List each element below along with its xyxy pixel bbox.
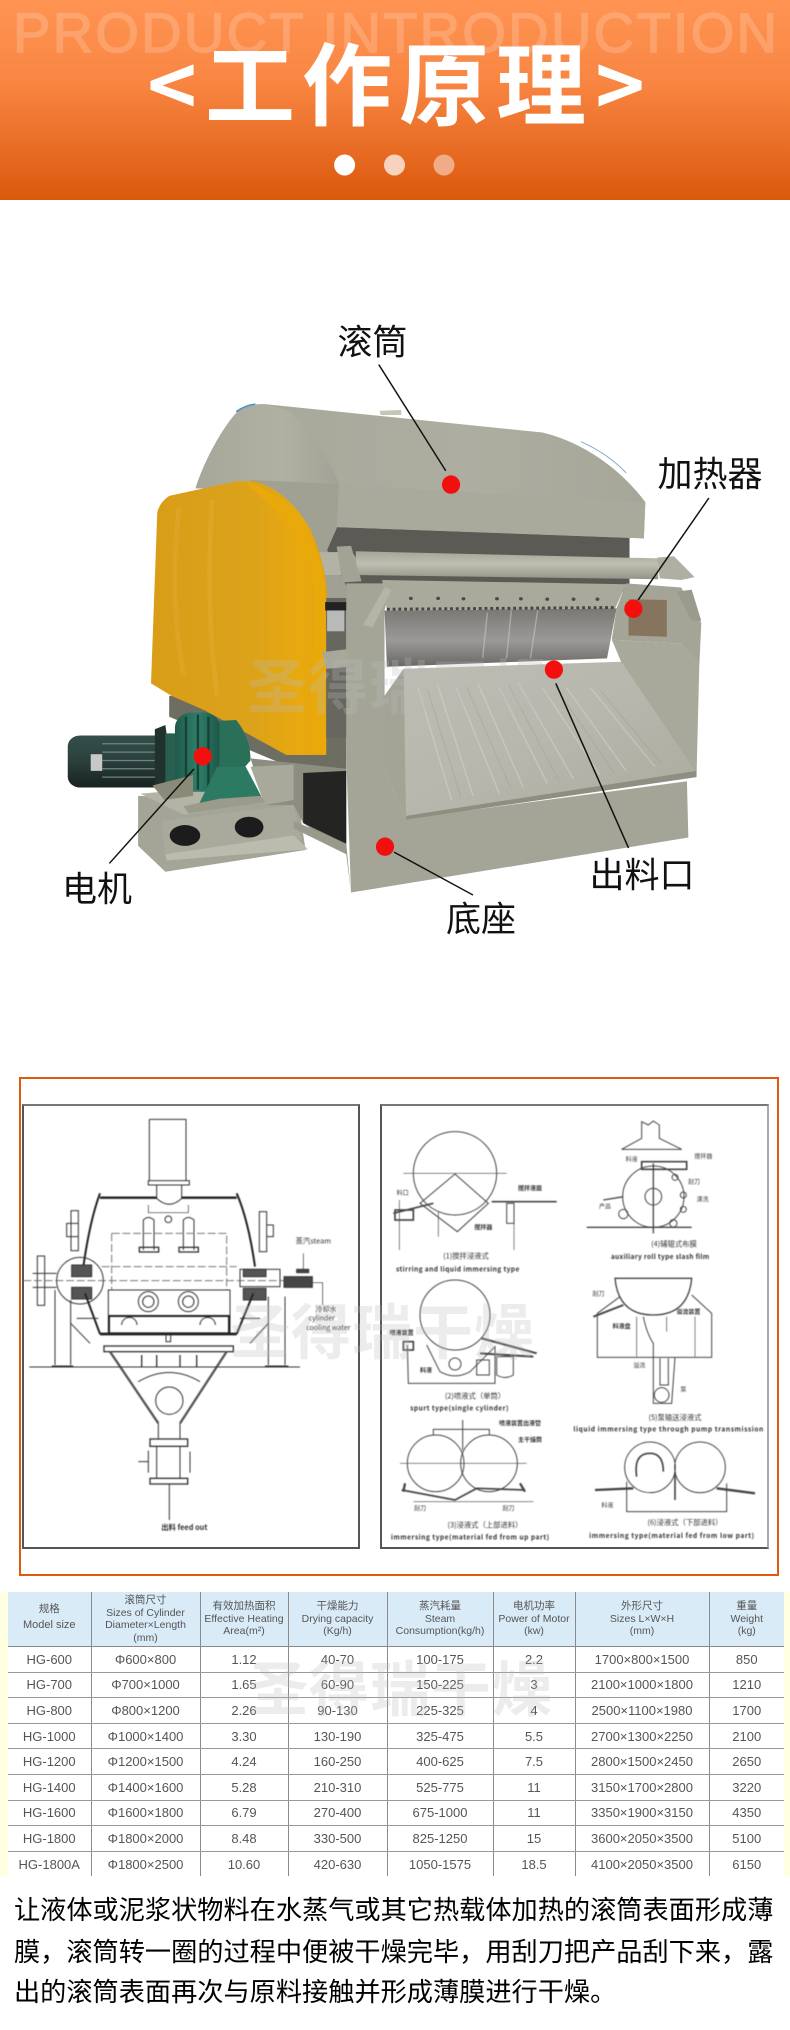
heading: working principle: < xyxy=(147,21,197,142)
specification table: 5.5 xyxy=(525,1729,543,1744)
specification table: 2700×1300×2250 xyxy=(591,1729,693,1744)
roller bar xyxy=(313,546,695,583)
label: feed out: 出料 feed out xyxy=(161,1522,207,1533)
specification table: 2.2 xyxy=(525,1652,543,1667)
discharge chute xyxy=(385,662,697,820)
type 1: stirring immersing: 料口 xyxy=(397,1188,409,1197)
specification table: 525-775 xyxy=(416,1780,464,1795)
type 1: stirring immersing: stirring and liquid immersing type xyxy=(396,1263,519,1273)
type 5: pump transmission: liquid immersing type through pump transmission xyxy=(573,1424,763,1434)
callout labels: 出料口 xyxy=(589,848,695,898)
specification table: 3350×1900×3150 xyxy=(591,1805,693,1820)
cover end panel behind guard xyxy=(251,480,347,606)
specification table: 210-310 xyxy=(314,1780,361,1795)
type 6: immersing lower feed xyxy=(589,1442,755,1540)
specification table xyxy=(8,1592,784,1876)
specification table: 160-250 xyxy=(314,1754,361,1769)
drawing: six film-forming types xyxy=(380,1104,769,1549)
specification table: HG-1000 xyxy=(23,1729,76,1744)
specification table: (Kg/h) xyxy=(323,1625,352,1637)
specification table: 130-190 xyxy=(314,1729,361,1744)
description paragraph: 膜，滚筒转一圈的过程中便被干燥完毕，用刮刀把产品刮下来，露 xyxy=(14,1931,773,1969)
heading: working principle: 工作原理 xyxy=(205,14,593,144)
type 1: stirring immersing: 搅拌器 xyxy=(474,1222,492,1231)
type 5: pump transmission: 溢流 xyxy=(633,1360,645,1369)
type 4: auxiliary roll: 产品 xyxy=(599,1201,611,1210)
specification table: Φ1800×2000 xyxy=(108,1831,183,1846)
callout labels: 电机 xyxy=(62,862,132,912)
rear fill behind roller xyxy=(322,517,630,604)
specification table: 40-70 xyxy=(321,1652,354,1667)
specification table: 325-475 xyxy=(416,1729,464,1744)
specification table: Steam xyxy=(425,1613,455,1625)
specification table: (mm) xyxy=(133,1632,158,1644)
specification table: 11 xyxy=(527,1780,541,1795)
type 6: immersing lower feed: 料液 xyxy=(601,1500,613,1509)
type 4: auxiliary roll: auxiliary roll type slash film xyxy=(611,1251,709,1261)
specification table: 330-500 xyxy=(314,1831,361,1846)
main frame xyxy=(346,583,688,893)
specification table: 滚筒尺寸 xyxy=(124,1594,166,1606)
drawing: section view of the dryer xyxy=(22,1104,360,1549)
label: cooling water xyxy=(306,1305,351,1333)
specification table: HG-1600 xyxy=(23,1805,76,1820)
specification table: 3600×2050×3500 xyxy=(591,1831,693,1846)
panel: orange framed technical drawings xyxy=(19,1077,779,1576)
specification table: 1700×800×1500 xyxy=(595,1652,689,1667)
type 5: pump transmission: 刮刀 xyxy=(592,1289,604,1298)
specification table: HG-1800 xyxy=(23,1831,76,1846)
type 1: stirring immersing: (1)搅拌浸液式 xyxy=(443,1250,489,1261)
header banner xyxy=(0,0,790,200)
specification table: 18.5 xyxy=(521,1857,547,1872)
specification table: 675-1000 xyxy=(413,1805,467,1820)
specification table: Effective Heating xyxy=(204,1613,284,1625)
specification table: HG-600 xyxy=(26,1652,72,1667)
specification table: 90-130 xyxy=(317,1703,358,1718)
specification table: 2100 xyxy=(732,1729,761,1744)
specification table: 6.79 xyxy=(231,1805,257,1820)
motor side base xyxy=(138,783,308,872)
type 2: spurt single cylinder: spurt type(single cylinder) xyxy=(410,1403,509,1413)
specification table: 15 xyxy=(527,1831,541,1846)
specification table: 400-625 xyxy=(416,1754,464,1769)
specification table: 2500×1100×1980 xyxy=(592,1703,692,1718)
drawing: feeding type diagrams xyxy=(389,1120,764,1542)
drum cover xyxy=(196,404,645,546)
description paragraph: 让液体或泥浆状物料在水蒸气或其它热载体加热的滚筒表面形成薄 xyxy=(14,1889,773,1927)
specification table: Φ1800×2500 xyxy=(108,1857,183,1872)
type 3: immersing upper feed: 主干燥筒 xyxy=(518,1435,542,1444)
specification table: 6150 xyxy=(732,1857,761,1872)
specification table: Drying capacity xyxy=(302,1613,373,1625)
specification table: 2.26 xyxy=(231,1703,257,1718)
specification table: 7.5 xyxy=(525,1754,543,1769)
specification table: HG-800 xyxy=(26,1703,72,1718)
specification table: 225-325 xyxy=(416,1703,464,1718)
type 6: immersing lower feed: (6)浸液式（下部进料） xyxy=(648,1517,722,1528)
yellow guard xyxy=(151,481,327,755)
specification table: 8.48 xyxy=(231,1831,257,1846)
specification table: 1210 xyxy=(732,1677,761,1692)
watermark: table: 圣得瑞干燥 xyxy=(248,1642,553,1729)
specification table: 3150×1700×2800 xyxy=(591,1780,693,1795)
right side housing xyxy=(612,583,701,777)
red marker dots xyxy=(194,475,642,856)
specification table: 4100×2050×3500 xyxy=(591,1857,693,1872)
specification table: HG-700 xyxy=(26,1677,72,1692)
specification table: HG-1200 xyxy=(23,1754,76,1769)
specification table: Φ1600×1800 xyxy=(108,1805,183,1820)
specification table: 850 xyxy=(736,1652,758,1667)
english background title: PRODUCT INTRODUCTION xyxy=(13,1,777,64)
cylinder and linkage xyxy=(322,598,351,738)
specification table: 150-225 xyxy=(416,1677,464,1692)
type 2: spurt single cylinder: (2)喷液式（单筒） xyxy=(445,1390,505,1401)
type 3: immersing upper feed: 刮刀 xyxy=(502,1504,514,1513)
specification table: 3.30 xyxy=(231,1729,257,1744)
specification table: Power of Motor xyxy=(498,1613,570,1625)
type 5: pump transmission xyxy=(573,1278,763,1434)
type 2: spurt single cylinder: 喷液装置 xyxy=(390,1328,414,1337)
specification table: 2650 xyxy=(732,1754,761,1769)
type 4: auxiliary roll: (4)辅辊式布膜 xyxy=(651,1239,697,1250)
specification table: 11 xyxy=(527,1805,541,1820)
callout labels: 加热器 xyxy=(657,446,763,498)
specification table: Φ800×1200 xyxy=(111,1703,180,1718)
specification table: (kg) xyxy=(738,1625,756,1637)
type 4: auxiliary roll: 清洗 xyxy=(697,1195,709,1204)
specification table: (mm) xyxy=(630,1625,654,1637)
specification table: 4 xyxy=(530,1703,538,1718)
specification table: HG-1800A xyxy=(19,1857,80,1872)
specification table: Model size xyxy=(23,1619,76,1631)
callout labels: 滚筒 xyxy=(337,314,408,366)
specification table: Φ1000×1400 xyxy=(108,1729,183,1744)
callout labels: 底座 xyxy=(446,892,516,942)
label: cooling water: cylinder xyxy=(308,1314,335,1324)
description paragraph xyxy=(14,1889,773,2009)
description paragraph: 出的滚筒表面再次与原料接触并形成薄膜进行干燥。 xyxy=(14,1971,616,2009)
specification table: 5100 xyxy=(732,1831,761,1846)
specification table: Sizes of Cylinder xyxy=(106,1606,185,1618)
type 1: stirring immersing: 搅拌液面 xyxy=(518,1184,542,1193)
specification table: 420-630 xyxy=(314,1857,361,1872)
specification table: 干燥能力 xyxy=(316,1600,358,1612)
specification table: Sizes L×W×H xyxy=(610,1613,674,1625)
specification table: 3 xyxy=(530,1677,538,1692)
type 2: spurt single cylinder xyxy=(390,1280,537,1413)
machine illustration xyxy=(68,404,701,893)
label: cooling water: 冷却水 xyxy=(316,1305,336,1315)
type 3: immersing upper feed: (3)浸液式（上部进料） xyxy=(448,1519,522,1530)
specification table: 60-90 xyxy=(321,1677,354,1692)
type 4: auxiliary roll: 料液 xyxy=(626,1155,638,1164)
side tint behind table xyxy=(0,1592,790,1876)
drawing: section view lines xyxy=(23,1118,351,1533)
specification table: Φ700×1000 xyxy=(111,1677,180,1692)
type 2: spurt single cylinder: 料液 xyxy=(420,1366,432,1375)
type 4: auxiliary roll xyxy=(587,1121,712,1261)
dark rear opening xyxy=(169,696,351,893)
three pagination dots xyxy=(334,154,454,176)
specification table: 电机功率 xyxy=(513,1600,555,1612)
callout labels xyxy=(62,314,763,942)
specification table: 825-1250 xyxy=(413,1831,467,1846)
type 1: stirring immersing xyxy=(393,1132,557,1273)
heading: working principle: > xyxy=(595,21,645,142)
specification table: Φ1400×1600 xyxy=(108,1780,183,1795)
specification table: Consumption(kg/h) xyxy=(396,1625,484,1637)
specification table: 4.24 xyxy=(231,1754,257,1769)
specification table: 5.28 xyxy=(231,1780,257,1795)
drum window xyxy=(385,608,617,667)
watermark: drawing panel: 圣得瑞干燥 xyxy=(230,1285,535,1372)
specification table: 规格 xyxy=(39,1603,60,1615)
type 3: immersing upper feed xyxy=(391,1418,549,1541)
specification table: Φ600×800 xyxy=(115,1652,176,1667)
specification table: 外形尺寸 xyxy=(621,1600,663,1612)
type 3: immersing upper feed: immersing type(material fed from up part) xyxy=(391,1531,549,1541)
scraper blade xyxy=(363,580,626,627)
panel: machine photo with callouts xyxy=(62,314,763,942)
specification table: HG-1400 xyxy=(23,1780,76,1795)
specification table: Area(m²) xyxy=(223,1625,265,1637)
specification table: 3220 xyxy=(732,1780,761,1795)
type 5: pump transmission: 料液盘 xyxy=(613,1322,631,1331)
type 4: auxiliary roll: 搅拌器 xyxy=(694,1151,712,1160)
specification table: 4350 xyxy=(732,1805,761,1820)
specification table: 270-400 xyxy=(314,1805,361,1820)
specification table: 1700 xyxy=(732,1703,761,1718)
specification table: Weight xyxy=(730,1613,763,1625)
specification table: 2100×1000×1800 xyxy=(591,1677,693,1692)
label: steam: 蒸汽steam xyxy=(296,1235,331,1246)
type 6: immersing lower feed: immersing type(material fed from low part) xyxy=(589,1530,754,1540)
leader lines xyxy=(109,365,709,895)
specification table: 有效加热面积 xyxy=(212,1600,276,1612)
type 3: immersing upper feed: 刮刀 xyxy=(414,1504,426,1513)
specification table: 1.65 xyxy=(231,1677,257,1692)
type 5: pump transmission: (5)泵输送浸液式 xyxy=(648,1412,702,1423)
type 3: immersing upper feed: 喷液装置出液管 xyxy=(499,1418,541,1427)
label: cooling water: cooling water xyxy=(306,1323,351,1333)
specification table: 10.60 xyxy=(228,1857,260,1872)
watermark: machine photo: 圣得瑞干燥 xyxy=(247,640,552,727)
type 5: pump transmission: 泵 xyxy=(680,1385,686,1394)
specification table: 100-175 xyxy=(416,1652,464,1667)
type 4: auxiliary roll: 刮刀 xyxy=(688,1177,700,1186)
specification table: 1.12 xyxy=(231,1652,257,1667)
geared motor xyxy=(68,713,265,813)
specification table: Diameter×Length xyxy=(105,1619,186,1631)
specification table: Φ1200×1500 xyxy=(108,1754,183,1769)
specification table: (kw) xyxy=(524,1625,544,1637)
specification table: 1050-1575 xyxy=(409,1857,471,1872)
specification table: 蒸汽耗量 xyxy=(419,1600,461,1612)
specification table: 2800×1500×2450 xyxy=(591,1754,693,1769)
type 5: pump transmission: 溢流装置 xyxy=(676,1307,700,1316)
specification table: 重量 xyxy=(736,1600,757,1612)
